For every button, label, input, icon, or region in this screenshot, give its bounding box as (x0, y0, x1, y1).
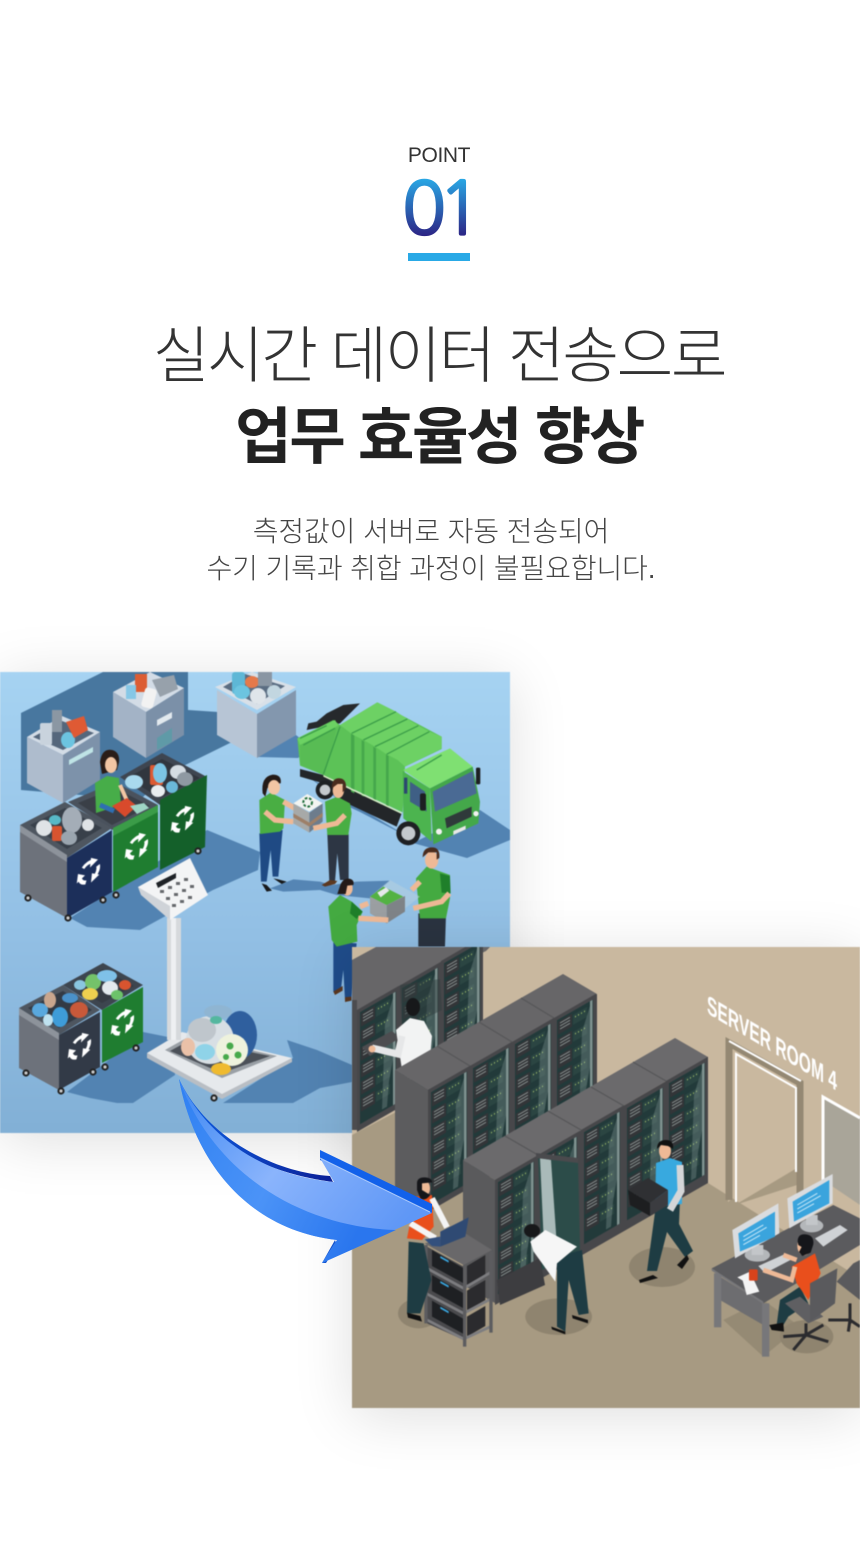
second box on tray (370, 880, 420, 923)
waste bag (181, 1005, 257, 1075)
recycling bins row (20, 750, 207, 922)
server rack row 2 (395, 974, 597, 1212)
office desk (712, 1174, 860, 1357)
server rack row 1 (352, 937, 490, 1132)
accent underline (408, 253, 470, 261)
technician with box (628, 1140, 695, 1287)
server rack row 3 (463, 1038, 708, 1305)
panel: waste weighing illustration (0, 672, 510, 1133)
technician at rack (368, 998, 432, 1070)
worker handing box left (259, 775, 295, 892)
technician with laptop (407, 1177, 469, 1322)
worker right receiving (412, 847, 451, 947)
title line 2: 업무 효율성 향상 (235, 403, 643, 472)
worker left passing box (328, 879, 388, 1002)
wall and floor (352, 947, 860, 1408)
recycling bins front (19, 963, 143, 1095)
point label: POINT (408, 144, 470, 167)
technician bending (524, 1224, 592, 1335)
description text: 수기 기록과 취합 과정이 불필요합니다. (207, 553, 655, 584)
worker sorting (95, 750, 149, 817)
panel: server room illustration (352, 947, 860, 1408)
arrow shape (179, 1079, 432, 1263)
platform scale (138, 858, 292, 1102)
back crates (27, 672, 296, 803)
workers exchanging boxes (259, 775, 451, 1002)
description text: 측정값이 서버로 자동 전송되어 (253, 516, 609, 547)
worker handing box right (313, 778, 352, 887)
office worker and chairs (763, 1234, 860, 1350)
door and window on wall (728, 1041, 860, 1205)
title line 1: 실시간 데이터 전송으로 (153, 322, 725, 391)
garbage truck (297, 702, 480, 845)
rack cart (398, 1233, 492, 1347)
first box (293, 794, 323, 833)
point number 01: 01 (402, 172, 482, 245)
floor shadows (21, 672, 510, 1103)
description text (207, 516, 655, 584)
